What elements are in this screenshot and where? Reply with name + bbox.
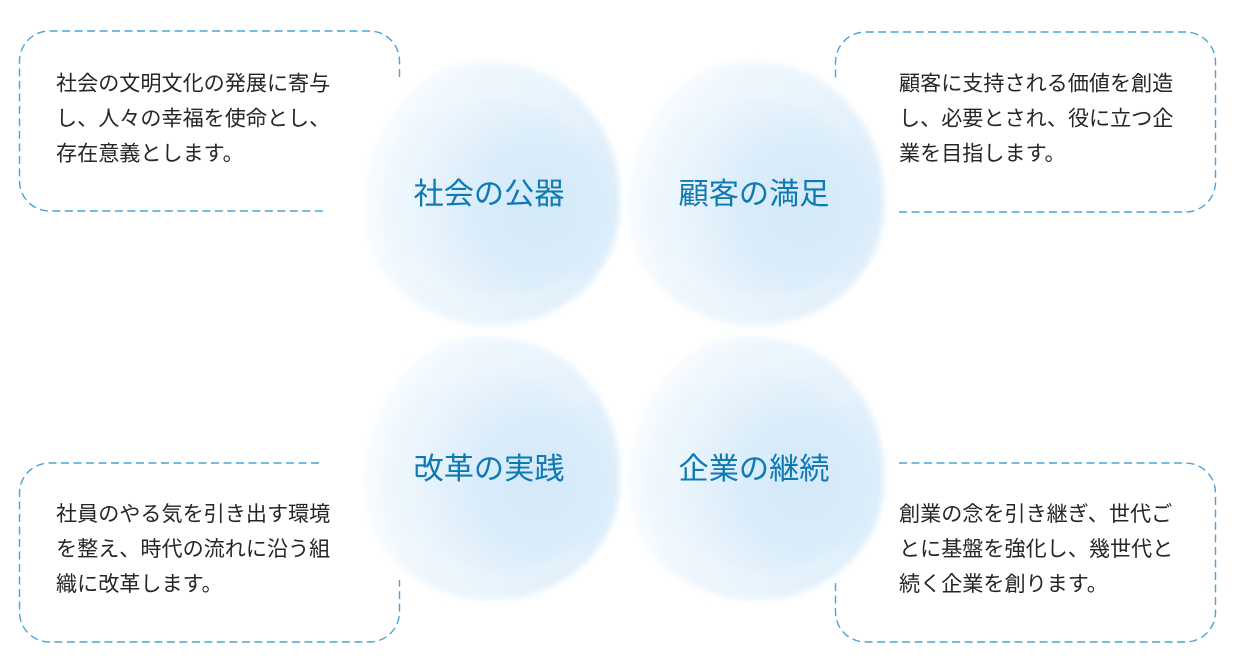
text block bottom-right: 創業の念を引き継ぎ、世代ご — [899, 502, 1172, 526]
dashed frame bottom-right — [836, 463, 1216, 642]
text block top-left: 存在意義とします。 — [56, 142, 244, 166]
text block bottom-left: 織に改革します。 — [56, 572, 223, 596]
panel: bottom-left description — [20, 463, 400, 642]
text block top-left: し、人々の幸福を使命とし、 — [56, 106, 330, 130]
dashed frame bottom-left — [20, 463, 400, 642]
text block top-left — [56, 72, 330, 166]
blob: 顧客の満足 — [627, 61, 884, 325]
text block bottom-left: を整え、時代の流れに沿う組 — [56, 537, 330, 561]
blob: 社会の公器 — [363, 61, 620, 325]
blob: 改革の実践 — [363, 336, 620, 600]
text block top-left: 社会の文明文化の発展に寄与 — [56, 72, 330, 96]
heading: 顧客の満足: 顧客の満足 — [678, 177, 829, 211]
heading: 企業の継続: 企業の継続 — [678, 452, 829, 486]
panel: bottom-right description — [836, 463, 1216, 642]
text block bottom-right: 続く企業を創ります。 — [899, 572, 1108, 596]
blob: 企業の継続 — [627, 336, 884, 600]
text block bottom-right: とに基盤を強化し、幾世代と — [899, 537, 1173, 561]
text block top-right: 業を目指します。 — [899, 142, 1066, 166]
panel: top-right description — [836, 32, 1216, 212]
text block bottom-left — [56, 502, 330, 596]
text block bottom-left: 社員のやる気を引き出す環境 — [56, 502, 330, 526]
heading: 社会の公器: 社会の公器 — [414, 177, 564, 211]
text block bottom-right — [899, 502, 1173, 596]
dashed frame top-right — [836, 32, 1216, 212]
text block top-right: 顧客に支持される価値を創造 — [899, 72, 1173, 96]
panel: top-left description — [20, 31, 400, 211]
heading: 改革の実践: 改革の実践 — [414, 452, 564, 486]
text block top-right: し、必要とされ、役に立つ企 — [899, 106, 1173, 130]
text block top-right — [899, 72, 1173, 166]
dashed frame top-left — [20, 31, 400, 211]
